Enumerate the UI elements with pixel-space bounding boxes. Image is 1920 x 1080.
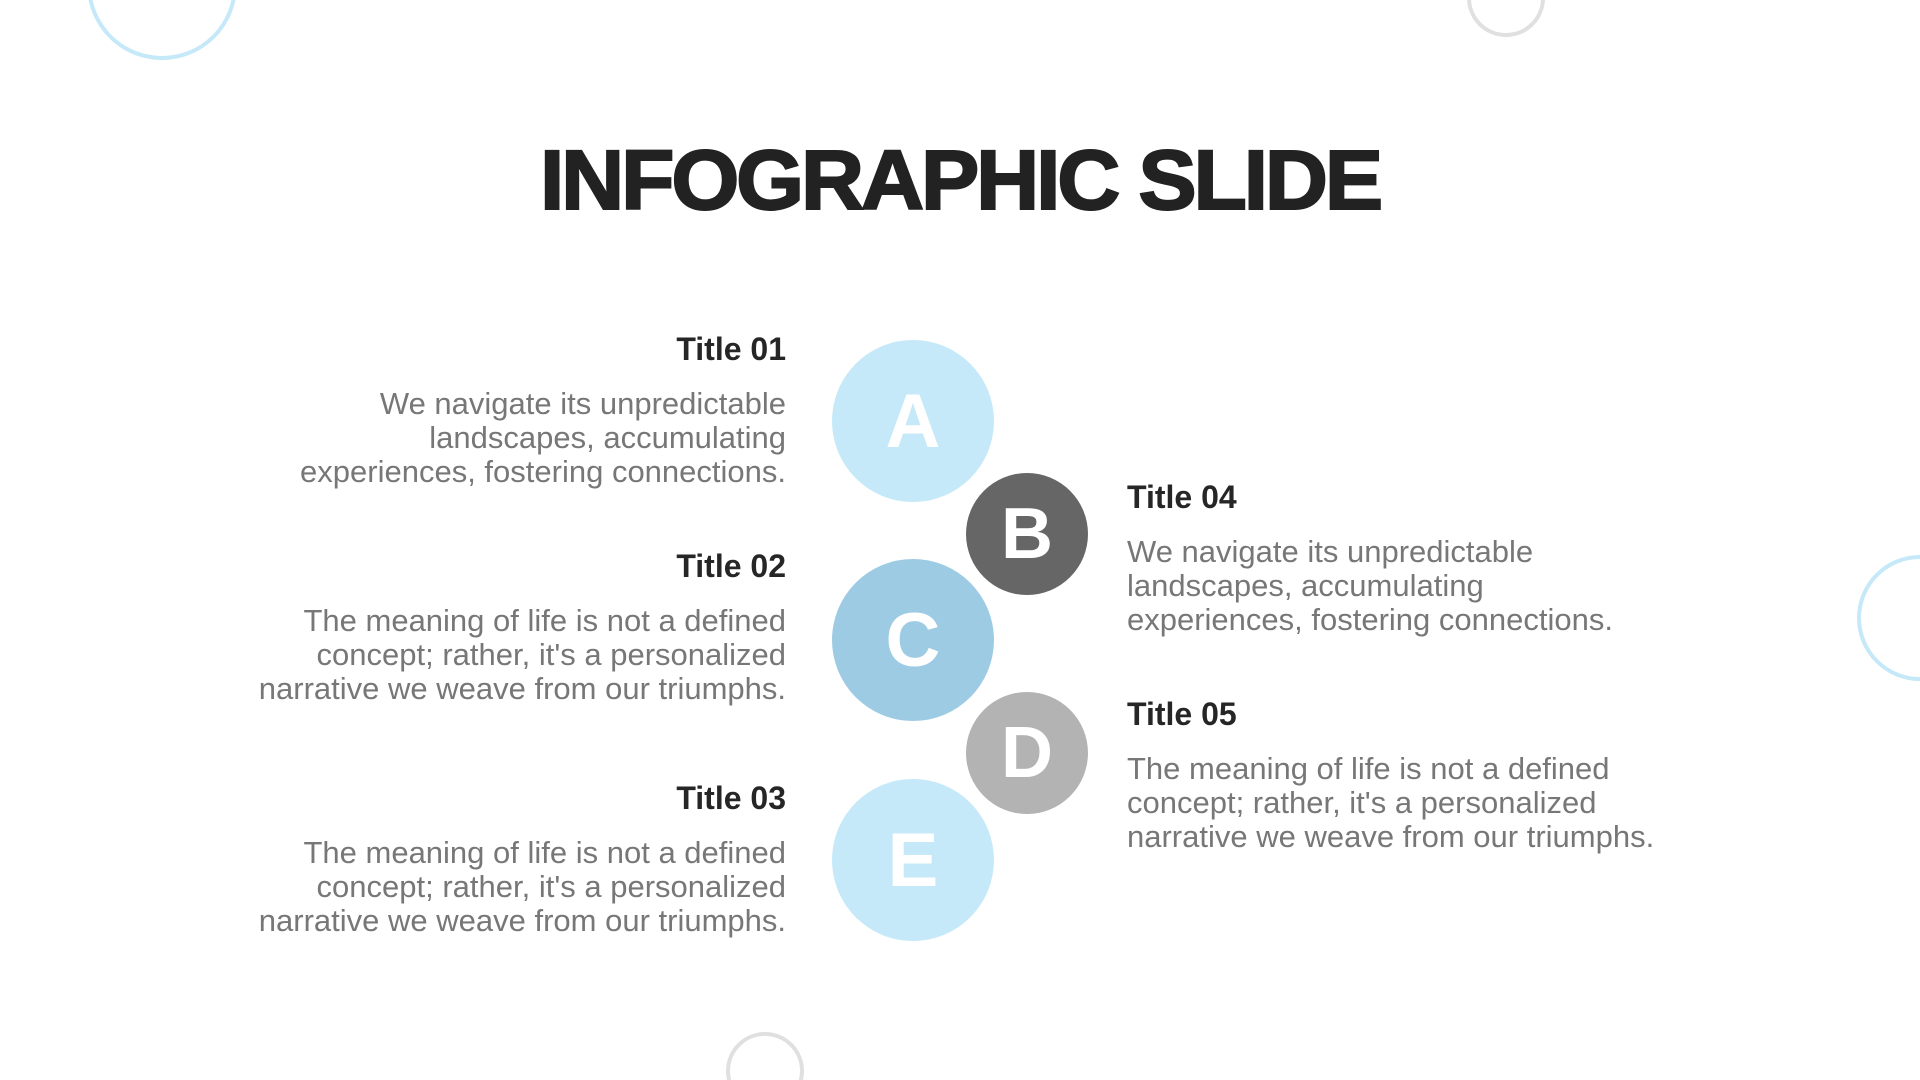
body 04: landscapes, accumulating [1127,568,1484,603]
body 01: landscapes, accumulating [429,420,786,455]
circle D: D [1001,713,1053,793]
body 01: We navigate its unpredictable [380,386,786,421]
body 03: concept; rather, it's a personalized [317,869,786,904]
body 01 [300,386,786,489]
text block: title 03 [259,780,786,938]
body 02: concept; rather, it's a personalized [317,637,786,672]
title: INFOGRAPHIC SLIDE [540,133,1380,227]
body 04: experiences, fostering connections. [1127,602,1613,637]
heading 05: Title 05 [1127,696,1237,732]
body 01: experiences, fostering connections. [300,454,786,489]
circle D [966,692,1088,814]
heading 02: Title 02 [676,548,786,584]
body 02: The meaning of life is not a defined [303,603,786,638]
body 02 [259,603,786,706]
body 05 [1127,751,1654,854]
body 02: narrative we weave from our triumphs. [259,671,786,706]
text block: title 04 [1127,479,1613,637]
heading 04: Title 04 [1127,479,1237,515]
body 05: concept; rather, it's a personalized [1127,785,1596,820]
text block: title 05 [1127,696,1654,854]
circle A: A [886,378,940,464]
circle E [832,779,994,941]
body 05: narrative we weave from our triumphs. [1127,819,1654,854]
body 04: We navigate its unpredictable [1127,534,1533,569]
body 05: The meaning of life is not a defined [1127,751,1610,786]
text block: title 02 [259,548,786,706]
heading 01: Title 01 [676,331,786,367]
heading 03: Title 03 [676,780,786,816]
body 03: The meaning of life is not a defined [303,835,786,870]
circle C [832,559,994,721]
body 03 [259,835,786,938]
circle B: B [1001,494,1053,574]
circle C: C [886,598,940,682]
body 04 [1127,534,1613,637]
body 03: narrative we weave from our triumphs. [259,903,786,938]
circle A [832,340,994,502]
circle B [966,473,1088,595]
circle E: E [888,818,938,902]
text block: title 01 [300,331,786,489]
